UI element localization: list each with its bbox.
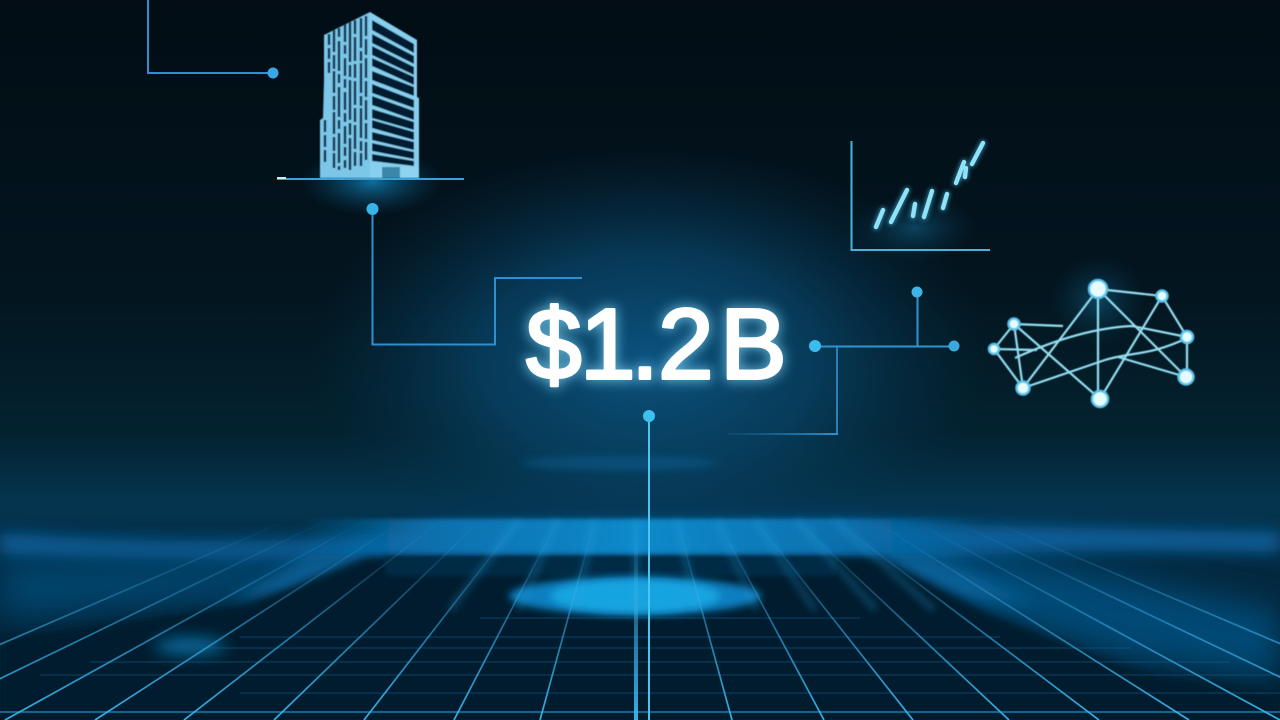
building right face xyxy=(370,12,419,178)
connector: top left xyxy=(148,0,278,78)
floor haze right xyxy=(830,556,1280,680)
floor glow ellipse xyxy=(509,577,761,615)
headline value: $1.2B xyxy=(526,288,787,400)
network edges xyxy=(994,289,1187,399)
dark floor xyxy=(0,557,1280,720)
horizontal grid lines xyxy=(40,618,1280,693)
connector: building to value xyxy=(366,203,582,344)
glowing horizon band xyxy=(0,519,1280,561)
building left face xyxy=(318,10,374,180)
connector: value to floor xyxy=(643,410,655,720)
floor haze left xyxy=(0,556,400,620)
floor glow spot xyxy=(154,638,226,654)
building body xyxy=(318,10,419,180)
headline value: $1.2B xyxy=(526,288,787,400)
connector: chart and network branch xyxy=(728,286,960,434)
blurred grid rays xyxy=(450,520,934,610)
icon: line chart xyxy=(852,141,990,262)
icon: neural network xyxy=(989,255,1194,407)
perspective grid xyxy=(0,520,1280,720)
converging grid lines xyxy=(0,520,1280,720)
icon: office building xyxy=(277,10,464,216)
building ground line xyxy=(277,178,464,180)
network nodes xyxy=(989,280,1194,407)
